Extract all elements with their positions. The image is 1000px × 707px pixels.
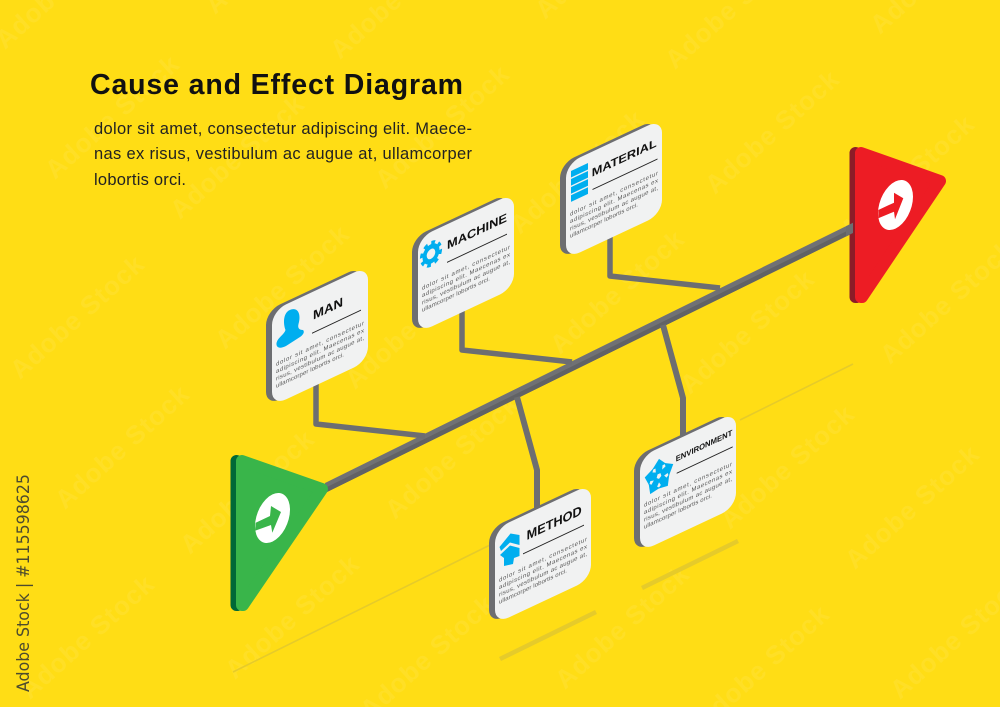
text: environment: adipiscing elit. Maecenas ex (644, 468, 733, 516)
text: material: adipiscing elit. Maecenas ex (570, 177, 659, 225)
icon: end arrow (878, 173, 913, 237)
icon: gear (421, 238, 441, 269)
watermark pattern: Adobe Stock (4, 248, 150, 384)
watermark pattern: Adobe Stock (174, 423, 320, 559)
branch: environment (663, 325, 683, 438)
text: method: dolor sit amet, consectetur (499, 536, 587, 584)
text: environment: dolor sit amet, consectetur (644, 461, 732, 509)
watermark pattern: Adobe Stock (549, 558, 695, 694)
text: environment: risus, vestibulum ac augue at, (644, 476, 732, 524)
start marker: green triangle (236, 461, 322, 605)
watermark pattern: Adobe Stock (14, 568, 160, 704)
fishbone spine (325, 223, 853, 493)
icon: up arrows (500, 534, 520, 566)
heading: environment: ENVIRONMENT (676, 427, 733, 464)
watermark pattern: Adobe Stock (379, 388, 525, 524)
text: method: risus, vestibulum ac augue at, (499, 551, 587, 599)
watermark pattern: Adobe Stock (49, 378, 195, 514)
icon: person (276, 309, 304, 348)
panel: method (489, 484, 591, 624)
text: man: ullamcorper lobortis orci. (276, 351, 344, 390)
watermark pattern: Adobe Stock (714, 398, 860, 534)
text: man (276, 320, 365, 390)
branch: machine (462, 305, 572, 362)
text: method: ullamcorper lobortis orci. (499, 567, 567, 606)
text: man: risus, vestibulum ac augue at, (276, 335, 364, 383)
intro text block: nas ex risus, vestibulum ac augue at, ullamcorper (94, 145, 472, 163)
icon: start arrow (255, 486, 290, 550)
intro text block: dolor sit amet, consectetur adipiscing elit. Maece- (94, 120, 472, 138)
text: material: dolor sit amet, consectetur (570, 170, 658, 218)
text: man: dolor sit amet, consectetur (276, 320, 364, 368)
heading: material: MATERIAL (592, 136, 657, 180)
text: machine (422, 244, 511, 314)
end marker: red triangle (856, 153, 940, 297)
text: machine: ullamcorper lobortis orci. (422, 275, 490, 314)
panel: man (266, 266, 368, 406)
heading: method: METHOD (527, 503, 582, 543)
icon: radiating arrows (643, 451, 675, 502)
text: machine: risus, vestibulum ac augue at, (422, 259, 510, 307)
intro text block: lobortis orci. (94, 171, 186, 189)
icon: stacked layers (571, 163, 588, 202)
intro text block (94, 120, 472, 189)
ground shadows (233, 364, 853, 672)
watermark pattern: Adobe Stock (209, 218, 355, 354)
text: method (499, 536, 588, 606)
watermark pattern: Adobe Stock (369, 58, 515, 194)
text: environment (644, 461, 733, 531)
watermark pattern: Adobe Stock (339, 258, 485, 394)
text: machine: adipiscing elit. Maecenas ex (422, 251, 511, 299)
text: material (570, 170, 659, 240)
title: Cause and Effect Diagram (90, 69, 463, 101)
text: method: adipiscing elit. Maecenas ex (499, 543, 588, 591)
watermark pattern: Adobe Stock (839, 438, 985, 574)
watermark pattern: Adobe Stock (674, 263, 820, 399)
spine tip over red marker (846, 223, 853, 236)
branch: man (316, 380, 425, 436)
watermark pattern: Adobe Stock (39, 48, 185, 184)
watermark pattern: Adobe Stock (699, 63, 845, 199)
heading: man: MAN (313, 294, 343, 323)
watermark pattern: Adobe Stock (504, 103, 650, 239)
watermark pattern: Adobe Stock (164, 88, 310, 224)
watermark pattern: Adobe Stock (219, 548, 365, 684)
watermark pattern: Adobe Stock (834, 108, 980, 244)
branch: method (517, 397, 537, 512)
stock id text: Adobe Stock | #115598625 (14, 474, 34, 692)
text: material: ullamcorper lobortis orci. (570, 201, 638, 240)
panel: machine (412, 193, 514, 333)
text: environment: ullamcorper lobortis orci. (644, 492, 712, 531)
watermark pattern: Adobe Stock (544, 223, 690, 359)
text: machine: dolor sit amet, consectetur (422, 244, 510, 292)
panel: material (560, 119, 662, 259)
heading: machine: MACHINE (447, 211, 507, 252)
text: man: adipiscing elit. Maecenas ex (276, 327, 365, 375)
branch: material (610, 232, 720, 288)
panel: environment (634, 412, 736, 552)
text: material: risus, vestibulum ac augue at, (570, 185, 658, 233)
